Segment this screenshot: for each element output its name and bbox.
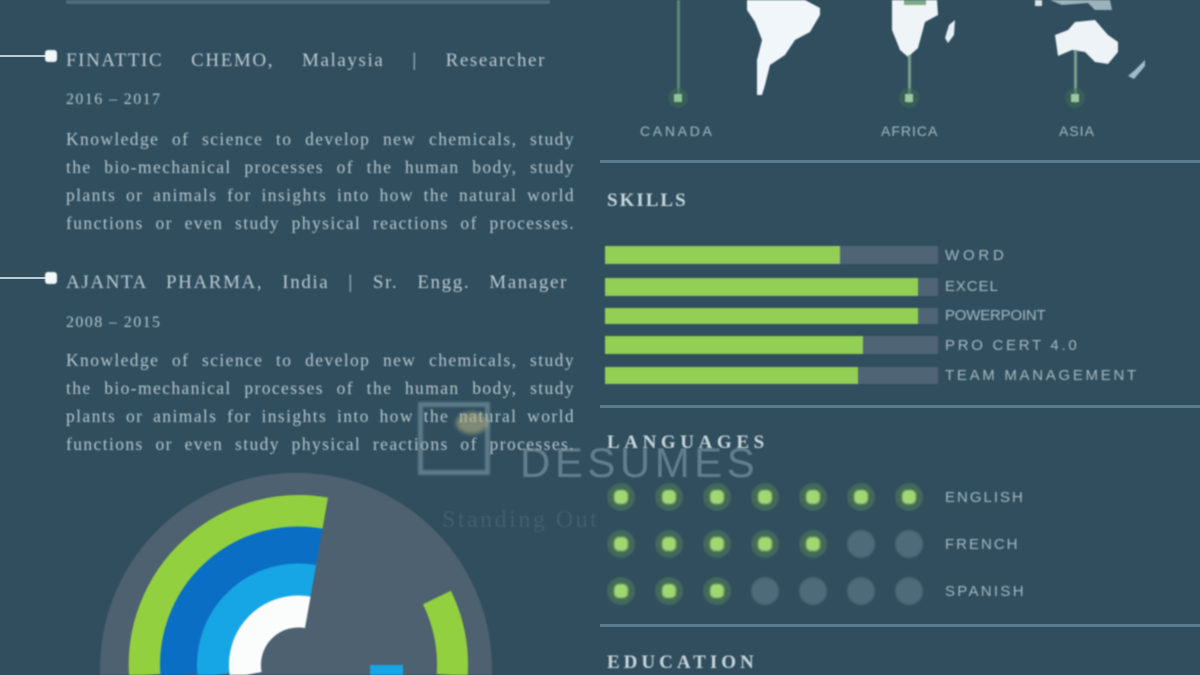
map label: Canada: CANADA [640, 123, 715, 139]
bar: PowerPoint [605, 308, 938, 324]
clipped text line at top [66, 0, 550, 4]
job heading: Ajanta Pharma: AJANTA PHARMA, India | Sr. Engg. Manager [66, 272, 568, 293]
job description: second job: plants or animals for insights into how the natural world [66, 406, 575, 426]
language dots: Spanish [606, 576, 924, 606]
timeline marker: first job [0, 49, 58, 63]
timeline marker: second job [0, 271, 58, 285]
job description: second job [66, 350, 575, 455]
job description: first job [66, 129, 575, 234]
world map with location pins [668, 0, 1146, 108]
bar label: Word: WORD [945, 247, 1008, 264]
radial chart [100, 472, 492, 675]
heading: skills: SKILLS [607, 190, 688, 211]
Asia fragment west [1035, 0, 1042, 6]
heading: education: EDUCATION [607, 652, 758, 673]
bar label: Excel: EXCEL [945, 278, 999, 295]
watermark wordmark: DESUMES [520, 439, 759, 486]
bar: Word [605, 246, 938, 264]
bar: Team Management [605, 367, 938, 384]
job description: first job: functions or even study physical reactions of processes. [66, 213, 575, 233]
ring: white [245, 611, 308, 675]
job description: second job: Knowledge of science to develop new chemicals, study [66, 350, 575, 370]
Africa green highlight [904, 0, 926, 5]
panel: work experience [0, 0, 575, 455]
job heading: Finattic Chemo: FINATTIC CHEMO, Malaysia | Researcher [66, 50, 546, 71]
island: New Zealand [1128, 60, 1145, 79]
ring: light blue right segment [370, 665, 403, 675]
continent: Africa [892, 0, 938, 57]
watermark emblem [456, 412, 488, 434]
job description: second job: the bio-mechanical processes of the human body, study [66, 378, 575, 398]
language label: French: FRENCH [945, 536, 1020, 553]
watermark logo [417, 401, 759, 533]
bar: Excel [605, 278, 938, 296]
watermark square [418, 402, 490, 475]
bar: Pro Cert [605, 336, 938, 354]
language dots: English [606, 482, 924, 512]
ring: light blue [213, 580, 313, 675]
language label: Spanish: SPANISH [945, 583, 1026, 600]
ring: dark blue [178, 545, 319, 675]
bar label: Pro Cert: PRO CERT 4.0 [945, 337, 1079, 354]
job description: first job: the bio-mechanical processes of the human body, study [66, 157, 575, 177]
job description: first job: Knowledge of science to develop new chemicals, study [66, 129, 575, 149]
ring: green [145, 511, 325, 675]
language label: English: ENGLISH [945, 489, 1025, 506]
language dots: French [606, 530, 924, 558]
island: Madagascar [945, 20, 955, 43]
job dates: first job: 2016 – 2017 [66, 91, 161, 108]
heading: languages: LANGUAGES [607, 432, 769, 453]
pin: Africa [899, 55, 919, 108]
job description: first job: plants or animals for insights into how the natural world [66, 185, 575, 205]
pin: Canada [668, 0, 688, 108]
continent: South America [747, 0, 820, 95]
map label: Africa: AFRICA [881, 123, 938, 139]
continent: Australia [1055, 20, 1118, 64]
bar label: PowerPoint: POWERPOINT [945, 307, 1046, 324]
map label: Asia: ASIA [1059, 123, 1095, 139]
watermark tagline: Standing Out [442, 507, 599, 533]
bar label: Team Management: TEAM MANAGEMENT [945, 367, 1139, 384]
Southeast Asia [1050, 0, 1112, 10]
job description: second job: functions or even study physical reactions of processes. [66, 434, 575, 454]
ring: green right segment [437, 598, 453, 675]
pin: Asia [1065, 50, 1085, 108]
job dates: second job: 2008 – 2015 [66, 314, 161, 331]
